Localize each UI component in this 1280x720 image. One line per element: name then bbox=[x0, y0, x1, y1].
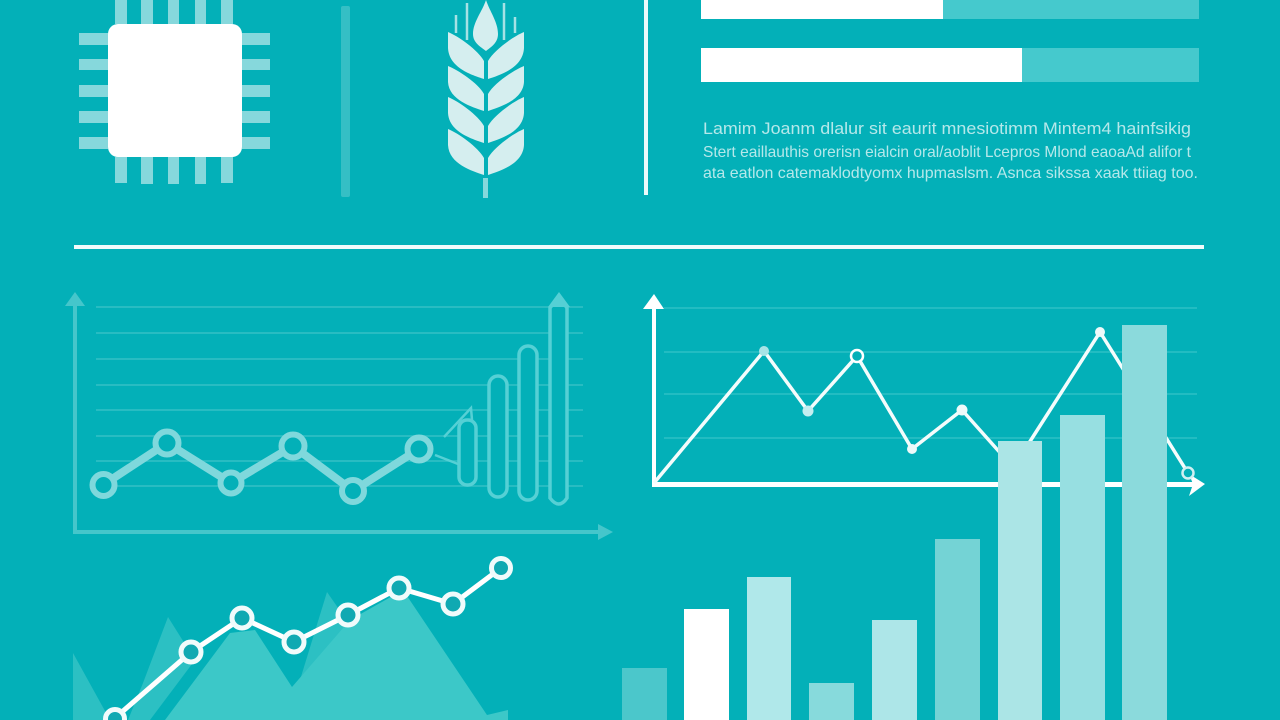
horizontal section divider bbox=[74, 245, 1204, 249]
area peaks bbox=[73, 590, 508, 720]
progress bar 1 bbox=[701, 0, 1199, 19]
icon: wheat ear bbox=[448, 0, 524, 198]
text block: ata eatlon catemaklodtyomx hupmaslsm. Asnca sikssa xaak ttiiag too. bbox=[703, 165, 1198, 182]
chart: left line chart with outlined bars bbox=[65, 292, 613, 540]
axes bbox=[65, 292, 613, 540]
outlined bars bbox=[459, 296, 567, 504]
data markers bbox=[759, 327, 1194, 478]
chart: right line chart bbox=[643, 294, 1205, 496]
text block bbox=[703, 119, 1198, 182]
line series bbox=[654, 332, 1188, 483]
icon: microchip bbox=[79, 0, 270, 184]
vertical white divider bbox=[644, 0, 648, 195]
line series bbox=[106, 558, 510, 720]
axes bbox=[643, 294, 1205, 496]
vertical divider between icons bbox=[341, 6, 350, 197]
progress bar 2 bbox=[701, 48, 1199, 82]
chart: bottom-left area and line bbox=[73, 558, 510, 720]
text block: Stert eaillauthis orerisn eialcin oral/aoblit Lcepros Mlond eaoaAd alifor t bbox=[703, 144, 1192, 161]
text block: Lamim Joanm dlalur sit eaurit mnesiotimm Mintem4 hainfsikig bbox=[703, 119, 1191, 138]
chart: bottom-right bar chart bbox=[622, 325, 1167, 720]
line series bbox=[92, 432, 430, 502]
